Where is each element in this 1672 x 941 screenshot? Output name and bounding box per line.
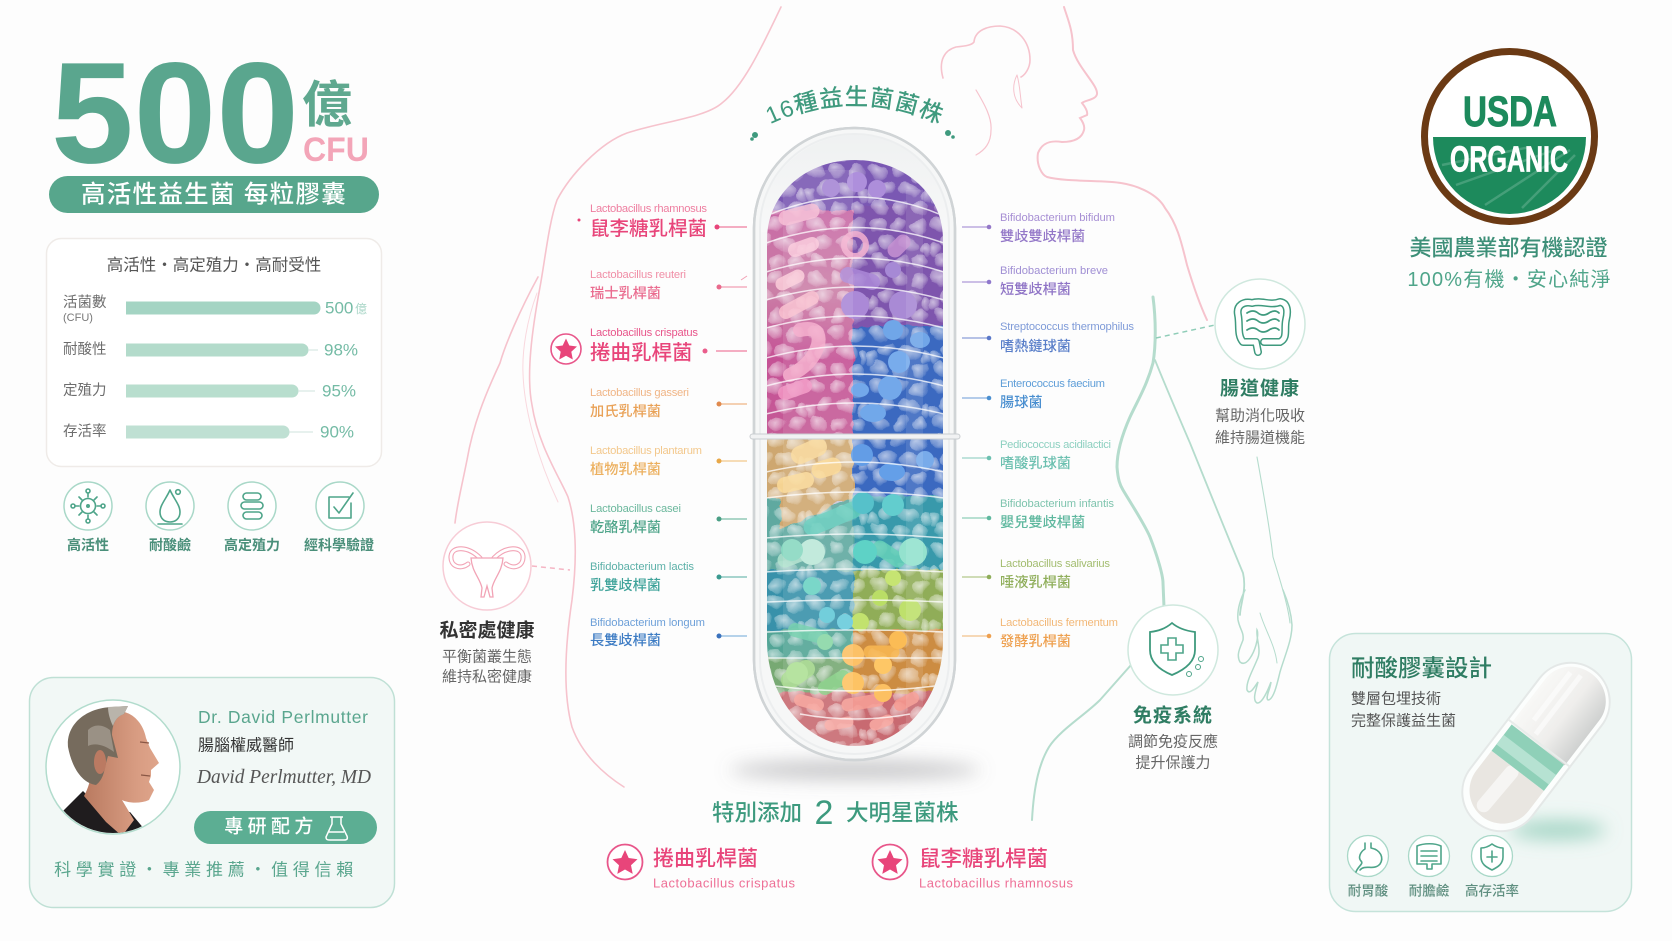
strain: casei: 乾酪乳桿菌 [590, 520, 661, 536]
star strain: crispatus [608, 844, 796, 890]
icon: bile intestine: 耐膽鹼 [1409, 882, 1450, 898]
strain: breve: 短雙歧桿菌 [1000, 281, 1071, 298]
research formula pill: 專研配方 [224, 814, 318, 838]
panel: acid resistant capsule: 完整保護益生菌 [1351, 712, 1456, 730]
strain: acidilactici: 嗜酸乳球菌 [1000, 455, 1071, 472]
bar: live count: 500 [325, 298, 353, 318]
strain: breve [962, 265, 1108, 298]
USDA organic seal: ORGANIC [1450, 138, 1568, 180]
icon: acid drop: 耐酸鹼 [149, 537, 191, 553]
icon: small shield [1465, 836, 1519, 898]
strain: faecium: 腸球菌 [1000, 395, 1043, 411]
bar: acid resistance: 98% [324, 340, 358, 360]
star strain: rhamnosus [872, 844, 1074, 890]
strain: fermentum: 發酵乳桿菌 [1000, 634, 1071, 650]
panel: acid resistant capsule [1330, 634, 1632, 912]
callout: immune system [1128, 605, 1218, 772]
strain: lactis [590, 561, 747, 594]
headline: 500 billion CFU: CFU [303, 131, 369, 169]
strain: casei [590, 503, 747, 536]
strain: acidilactici [962, 439, 1111, 472]
strain: faecium [962, 378, 1105, 411]
icon: scientifically verified: 經科學驗證 [304, 537, 374, 553]
strain: salivarius: 唾液乳桿菌 [1000, 575, 1071, 591]
special strains heading: 特別添加 [712, 800, 802, 826]
strain: salivarius: Lactobacillus salivarius [1000, 558, 1110, 570]
icon: intestines [1215, 279, 1305, 369]
strain: infantis: 嬰兒雙歧桿菌 [1000, 514, 1085, 531]
strain labels: right column [962, 212, 1134, 650]
strain: crispatus with star: 捲曲乳桿菌 [590, 342, 692, 364]
callout: immune system: 提升保護力 [1135, 754, 1211, 772]
doctor portrait [45, 700, 180, 850]
star strain: crispatus: Lactobacillus crispatus [653, 876, 796, 890]
panel: stats bars: 高活性・高定殖力・高耐受性 [107, 256, 321, 274]
callout: intimate health [439, 522, 570, 686]
icon: colonization beans: 高定殖力 [224, 537, 280, 553]
icon: stomach: 耐胃酸 [1348, 882, 1389, 898]
panel: doctor card [30, 678, 394, 908]
strain: rhamnosus: 鼠李糖乳桿菌 [590, 218, 707, 240]
strain: lactis: Bifidobacterium lactis [590, 561, 694, 573]
callout: gut health: 維持腸道機能 [1215, 430, 1305, 446]
star strain: crispatus: 捲曲乳桿菌 [653, 848, 758, 870]
bar: survival: 存活率 [63, 423, 106, 440]
strain: longum: 長雙歧桿菌 [590, 632, 661, 649]
capsule illustration [1447, 647, 1625, 847]
strain: faecium: Enterococcus faecium [1000, 378, 1105, 390]
strain: bifidum [962, 212, 1115, 245]
body outline: teal torso and arm [1032, 297, 1292, 820]
panel: acid resistant capsule: 雙層包埋技術 [1351, 690, 1441, 708]
callout: immune system: 調節免疫反應 [1128, 732, 1218, 750]
icon: small shield: 高存活率 [1465, 882, 1519, 898]
strain: plantarum: 植物乳桿菌 [590, 461, 661, 478]
callout: intimate health: 平衡菌叢生態 [442, 648, 532, 666]
curved title: 16種益生菌菌株 [766, 85, 944, 124]
headline pill [49, 176, 379, 213]
callout: gut health [1156, 279, 1305, 446]
bar: colonization: 定殖力 [63, 382, 106, 399]
star strain: rhamnosus: Lactobacillus rhamnosus [919, 876, 1074, 890]
bar: live count: 活菌數 [63, 294, 107, 311]
callout: intimate health: 維持私密健康 [442, 668, 532, 686]
bar: survival [63, 422, 354, 442]
strain: reuteri: 瑞士乳桿菌 [590, 286, 661, 302]
body outline: pink shoulder and torso [455, 7, 1207, 787]
icons row: high activity, bile tolerance, colonization, science [64, 482, 374, 553]
panel: stats bars [46, 238, 382, 466]
icon: bile intestine [1408, 836, 1450, 898]
strain: casei: Lactobacillus casei [590, 503, 681, 515]
callout: gut health: 幫助消化吸收 [1215, 408, 1305, 424]
icon: stomach [1348, 836, 1389, 898]
rings [766, 197, 944, 719]
bar: live count: (CFU) [63, 312, 93, 324]
strain: longum [590, 617, 747, 649]
callout: immune system: 免疫系統 [1133, 704, 1213, 726]
strain: gasseri [590, 387, 747, 420]
callout: intimate health: 私密處健康 [439, 618, 535, 642]
bar: survival: 90% [320, 422, 354, 442]
USDA caption: 100%有機・安心純淨 [1407, 268, 1612, 291]
capsule join band [750, 434, 960, 439]
icon: scientifically verified [304, 482, 374, 553]
USDA caption [1407, 236, 1612, 291]
headline: 500 billion CFU: 億 [302, 77, 352, 133]
icon: high activity: 高活性 [67, 537, 109, 553]
strain: salivarius [962, 558, 1110, 591]
signature: David Perlmutter, MD [196, 766, 372, 788]
strain: reuteri: Lactobacillus reuteri [590, 269, 686, 281]
doctor title: 腸腦權威醫師 [198, 736, 294, 754]
special strains heading: 2 [815, 794, 833, 832]
bar: colonization [63, 382, 356, 400]
callout: gut health: 腸道健康 [1220, 376, 1300, 400]
strain: plantarum [590, 445, 747, 478]
strain: gasseri: Lactobacillus gasseri [590, 387, 689, 399]
strain: breve: Bifidobacterium breve [1000, 265, 1108, 277]
strain: plantarum: Lactobacillus plantarum [590, 445, 702, 457]
bar: live count: 億 [355, 302, 367, 316]
star strain: rhamnosus: 鼠李糖乳桿菌 [919, 847, 1048, 871]
strain: thermophilus: 嗜熱鏈球菌 [1000, 338, 1071, 355]
large beans [782, 211, 913, 725]
USDA caption: 美國農業部有機認證 [1409, 236, 1608, 260]
trust line: 科學實證・專業推薦・值得信賴 [54, 860, 358, 880]
icon: shield [1128, 605, 1218, 695]
USDA organic seal [1424, 52, 1594, 222]
headline: 500 billion CFU: 500 [51, 32, 299, 194]
doctor name: Dr. David Perlmutter [198, 707, 368, 727]
icon: high activity [64, 482, 112, 553]
strain: longum: Bifidobacterium longum [590, 617, 705, 629]
strain: reuteri [590, 269, 747, 302]
strain: lactis: 乳雙歧桿菌 [590, 577, 661, 594]
strain: thermophilus: Streptococcus thermophilus [1000, 321, 1134, 333]
strain labels: left column [551, 203, 747, 649]
icon: colonization beans [224, 482, 280, 553]
special strains heading: 大明星菌株 [846, 800, 959, 826]
strain: bifidum: 雙歧雙歧桿菌 [1000, 228, 1085, 245]
strain: acidilactici: Pediococcus acidilactici [1000, 439, 1111, 451]
bar: acid resistance [63, 340, 358, 360]
strain: infantis [962, 498, 1114, 531]
strain: fermentum: Lactobacillus fermentum [1000, 617, 1118, 629]
strain: crispatus with star [551, 327, 747, 364]
bacteria colour layers [767, 160, 943, 746]
strain: thermophilus [962, 321, 1134, 355]
capsule shadow [730, 761, 980, 779]
headline pill: 高活性益生菌 每粒膠囊 [81, 180, 347, 208]
strain: bifidum: Bifidobacterium bifidum [1000, 212, 1115, 224]
research formula pill [194, 811, 377, 844]
bar: colonization: 95% [322, 382, 356, 400]
panel: acid resistant capsule: 耐酸膠囊設計 [1351, 655, 1492, 681]
strain: gasseri: 加氏乳桿菌 [590, 404, 661, 420]
bar: live count [63, 294, 367, 324]
strain: crispatus with star: Lactobacillus crispatus [590, 327, 698, 339]
central capsule with bacteria [750, 128, 963, 770]
strain: fermentum [962, 617, 1118, 650]
special strains heading [712, 794, 959, 832]
strain: rhamnosus [578, 203, 747, 240]
strain: rhamnosus: Lactobacillus rhamnosus [590, 203, 707, 215]
icon: acid drop [146, 482, 194, 553]
bar: acid resistance: 耐酸性 [63, 341, 106, 358]
curved title [750, 85, 955, 141]
icon: uterus [443, 522, 531, 610]
strain: infantis: Bifidobacterium infantis [1000, 498, 1114, 510]
USDA organic seal: USDA [1463, 88, 1557, 136]
